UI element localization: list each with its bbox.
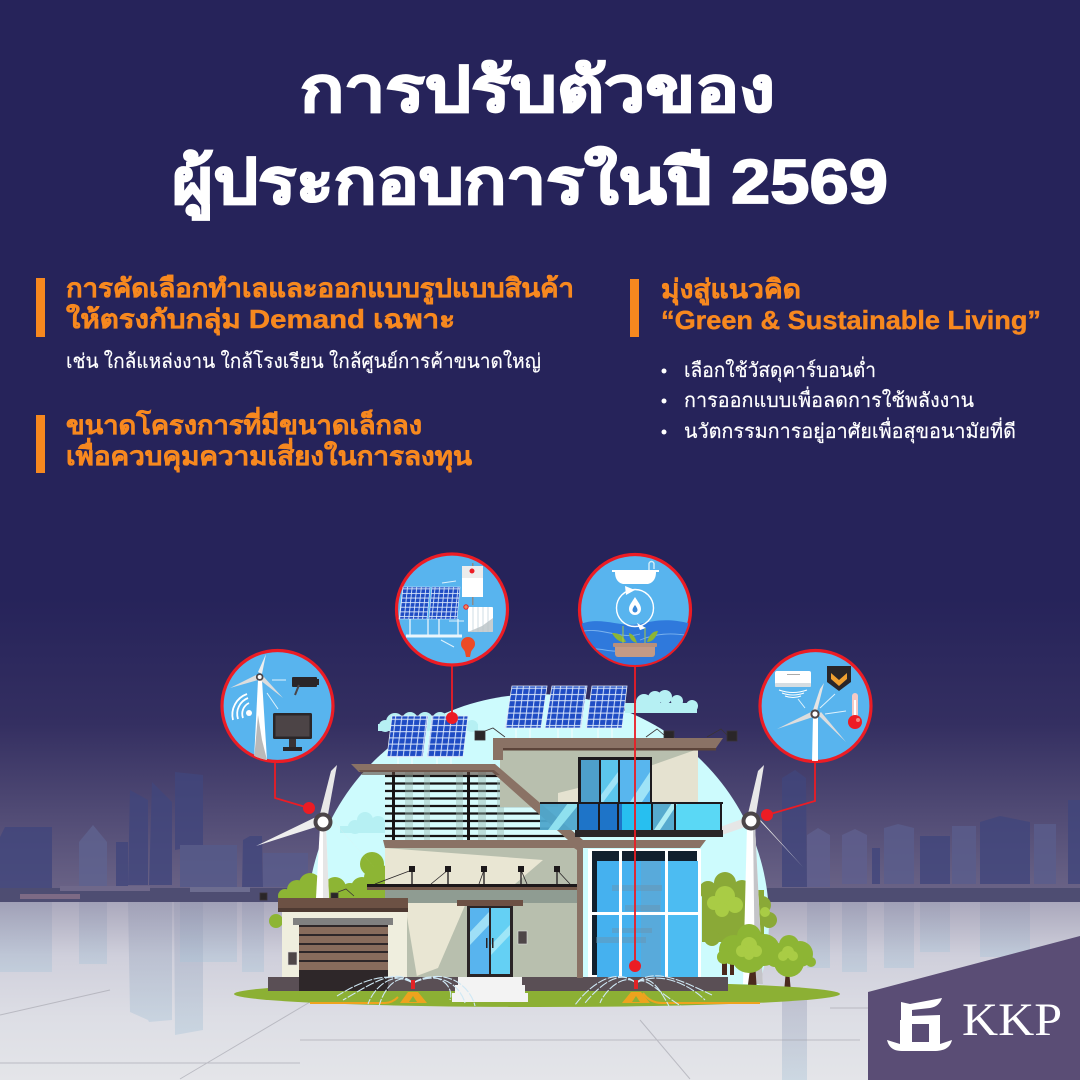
- floor joints: [0, 990, 880, 1079]
- left turbine: [256, 765, 374, 898]
- text block: target demand: [36, 273, 574, 374]
- big tree behind: [680, 872, 777, 975]
- icon: wind power to devices: [222, 650, 333, 762]
- upper right block: [493, 738, 723, 807]
- text block: target demand: เช่น ใกล้แหล่งงาน ใกล้โรงเรียน ใกล้ศูนย์การค้าขนาดใหญ่: [66, 350, 541, 374]
- connector: water: [629, 664, 641, 972]
- connector: climate: [761, 760, 815, 821]
- KKP wordmark: KKP: [962, 994, 1062, 1046]
- louvre screen: [385, 772, 575, 840]
- lower wall: [385, 848, 581, 978]
- text block: smaller projects: ขนาดโครงการที่มีขนาดเล็กลง: [66, 406, 422, 440]
- floor: [0, 902, 1080, 1080]
- text block: green and sustainable living: “Green & Sustainable Living”: [661, 305, 1041, 335]
- icon: cooling and climate: [760, 650, 871, 762]
- shoreline town: [0, 886, 1080, 902]
- text block: green and sustainable living: เลือกใช้วัสดุคาร์บอนต่ำ: [684, 356, 876, 383]
- clouds: [340, 690, 698, 834]
- logo panel: [868, 936, 1080, 1080]
- icon: water recycling: [578, 554, 692, 667]
- title: [172, 56, 888, 220]
- plinth: [268, 977, 728, 991]
- front trees: [717, 924, 816, 992]
- title: ผู้ประกอบการในปี 2569: [172, 146, 888, 220]
- text block: target demand: ให้ตรงกับกลุ่ม Demand เฉพาะ: [66, 304, 455, 336]
- text block: green and sustainable living: มุ่งสู่แนวคิด: [661, 274, 801, 306]
- text block: target demand: การคัดเลือกทำเลและออกแบบรูปแบบสินค้า: [66, 273, 574, 305]
- balcony with glass railing: [540, 802, 723, 837]
- skyline: [0, 770, 1080, 893]
- icon: solar power: [396, 554, 508, 665]
- connector: solar: [446, 664, 458, 724]
- garage: [278, 898, 417, 991]
- front door: [457, 900, 527, 977]
- text block: green and sustainable living: การออกแบบเพื่อลดการใช้พลังงาน: [684, 386, 974, 412]
- icon: KKP emblem: [887, 998, 952, 1051]
- solar panels on rear stands: [387, 686, 627, 764]
- lawn: [234, 981, 840, 1007]
- text block: smaller projects: [36, 406, 472, 473]
- sprinklers: [310, 976, 760, 1006]
- brown beams: [351, 764, 706, 978]
- entrance steps: [452, 977, 528, 1002]
- skyline reflection: [0, 902, 1030, 1080]
- large glass facade: [588, 849, 701, 977]
- text block: green and sustainable living: นวัตกรรมการอยู่อาศัยเพื่อสุขอนามัยที่ดี: [684, 417, 1016, 444]
- text block: smaller projects: เพื่อควบคุมความเสี่ยงในการลงทุน: [66, 437, 472, 473]
- dome backdrop: [307, 694, 769, 992]
- bushes: [269, 852, 392, 928]
- illustration: smart house: [234, 686, 840, 1007]
- cantilever shelf with lights: [367, 866, 581, 890]
- title: การปรับตัวของ: [300, 56, 775, 125]
- connector: entertainment: [275, 760, 315, 814]
- roof sensors: [260, 728, 737, 900]
- text block: green and sustainable living: [630, 274, 1041, 444]
- right turbine: [720, 765, 803, 984]
